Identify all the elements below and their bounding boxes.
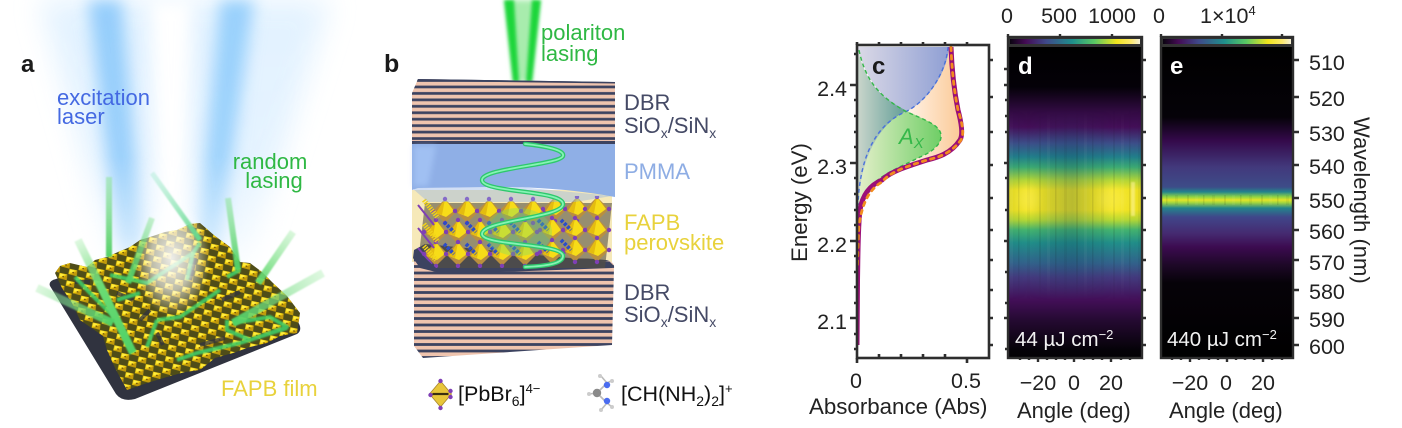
legend label: formamidinium: ) [704, 382, 711, 406]
random lasing beams [37, 173, 323, 353]
x tick labels e: 20 [1251, 371, 1275, 395]
label: top DBR: DBR [624, 90, 670, 115]
panel e: heat map 440 uJ [1153, 3, 1374, 423]
wavelength tick labels: 580 [1309, 280, 1345, 304]
x tick labels e: 0 [1220, 371, 1232, 395]
excitation laser beam [39, 0, 330, 254]
label: excitation laser: laser [57, 104, 105, 129]
heat map d [1008, 47, 1142, 358]
legend icon: octahedron [428, 379, 453, 410]
label: bottom DBR: x [661, 314, 668, 330]
perovskite crystal [418, 195, 612, 268]
label: bottom DBR: x [709, 314, 716, 330]
y tick labels: 2.4 [817, 77, 847, 101]
wavelength tick labels: 530 [1309, 122, 1345, 146]
label: bottom DBR: /SiN [668, 302, 709, 327]
label: PMMA: PMMA [624, 159, 690, 184]
label: top DBR: SiO [624, 113, 661, 138]
legend label: PbBr6: 4− [526, 381, 540, 396]
top DBR [412, 79, 615, 144]
wavelength tick labels: 600 [1309, 335, 1345, 359]
legend label: PbBr6: 6 [512, 393, 520, 409]
x tick labels: 0.5 [951, 369, 981, 393]
polariton lasing beam [504, 0, 541, 82]
legend label: PbBr6: ] [520, 382, 526, 406]
x tick labels d: −20 [1020, 371, 1056, 395]
label: top DBR: x [661, 125, 668, 141]
label: FAPB perovskite: perovskite [624, 230, 724, 255]
absorbance fill areas [857, 47, 963, 345]
purple measured curve [857, 47, 962, 345]
legend icon: formamidinium [587, 374, 614, 412]
panel label d: d [1018, 53, 1033, 80]
panel label b: b [384, 50, 399, 78]
label: bottom DBR: SiO [624, 302, 661, 327]
standing wave [482, 144, 563, 267]
label: top DBR: /SiN [668, 113, 709, 138]
panel label a: a [21, 51, 35, 78]
colour bar labels d: 500 [1041, 4, 1077, 28]
fluence e: −2 [1262, 327, 1277, 342]
label: random lasing: random [233, 149, 307, 174]
colour bar e [1161, 37, 1293, 47]
label: polariton lasing: lasing [541, 41, 598, 66]
frame e [1161, 34, 1299, 362]
x axis title d: Angle (deg) [1017, 398, 1131, 423]
label: top DBR: x [709, 125, 716, 141]
y tick labels: 2.2 [817, 233, 847, 257]
label: FAPB film: FAPB film [221, 376, 318, 401]
perovskite layer background [412, 190, 612, 262]
axes frame and ticks [850, 42, 993, 363]
green component dashed [857, 50, 941, 215]
x tick labels d: 20 [1099, 371, 1123, 395]
label: Ax: A [899, 124, 914, 149]
bottom DBR [413, 244, 614, 358]
wavelength tick labels: 520 [1309, 87, 1345, 111]
panel b: microcavity stack [384, 0, 733, 412]
colour bar d [1008, 37, 1142, 47]
colour bar labels d: 0 [1001, 4, 1013, 28]
label: polariton lasing: polariton [541, 20, 625, 45]
wavelength tick labels: 540 [1309, 155, 1345, 179]
frame d [1004, 34, 1146, 362]
fluence d: −2 [1099, 327, 1113, 342]
PMMA layer [412, 144, 615, 202]
label: Ax: X [913, 135, 925, 152]
wavelength tick labels: 510 [1309, 51, 1345, 75]
FAPB crystal film [55, 223, 300, 390]
legend label: formamidinium: [CH(NH [621, 382, 696, 406]
y tick labels: 2.1 [817, 310, 847, 334]
label: random lasing: lasing [245, 168, 303, 193]
panel c: absorbance chart [787, 42, 993, 419]
legend label: formamidinium: + [725, 381, 733, 396]
substrate [50, 228, 300, 400]
x tick labels e: −20 [1172, 371, 1208, 395]
colour bar labels d: 1000 [1088, 4, 1136, 28]
panel a: random lasing schematic [21, 0, 330, 401]
x axis title e: Angle (deg) [1169, 398, 1283, 423]
legend label: formamidinium: 2 [696, 393, 704, 409]
y tick labels: 2.3 [817, 155, 847, 179]
legend label: formamidinium: ] [719, 382, 725, 406]
wavelength tick labels: 570 [1309, 251, 1345, 275]
y axis title: Energy (eV) [787, 143, 812, 262]
x axis title: Absorbance (Abs) [809, 394, 987, 419]
blue component dashed [858, 47, 948, 205]
fluence d: 44 µJ cm [1015, 328, 1099, 351]
wavelength tick labels: 590 [1309, 308, 1345, 332]
legend label: formamidinium: 2 [711, 393, 719, 409]
label: excitation laser: excitation [57, 85, 150, 110]
fluence e: 440 µJ cm [1167, 328, 1262, 351]
wavelength tick labels: 550 [1309, 189, 1345, 213]
x tick labels d: 0 [1068, 371, 1080, 395]
panel d: heat map 44 uJ [1001, 4, 1146, 423]
orange fit curve [858, 47, 963, 265]
heat map e [1161, 47, 1293, 358]
panel label c: c [872, 53, 885, 80]
panel label e: e [1170, 53, 1183, 80]
colour bar labels e: 1×10 [1200, 4, 1248, 28]
colour bar labels e: 4 [1248, 3, 1256, 18]
white excitation glow [134, 200, 210, 316]
legend label: PbBr6: [PbBr [458, 382, 512, 406]
label: bottom DBR: DBR [624, 280, 670, 305]
label: FAPB perovskite: FAPB [624, 210, 680, 235]
wavelength axis title: Wavelength (nm) [1349, 117, 1374, 284]
x tick labels: 0 [850, 369, 862, 393]
colour bar labels e: 0 [1153, 4, 1165, 28]
wavelength tick labels: 560 [1309, 220, 1345, 244]
